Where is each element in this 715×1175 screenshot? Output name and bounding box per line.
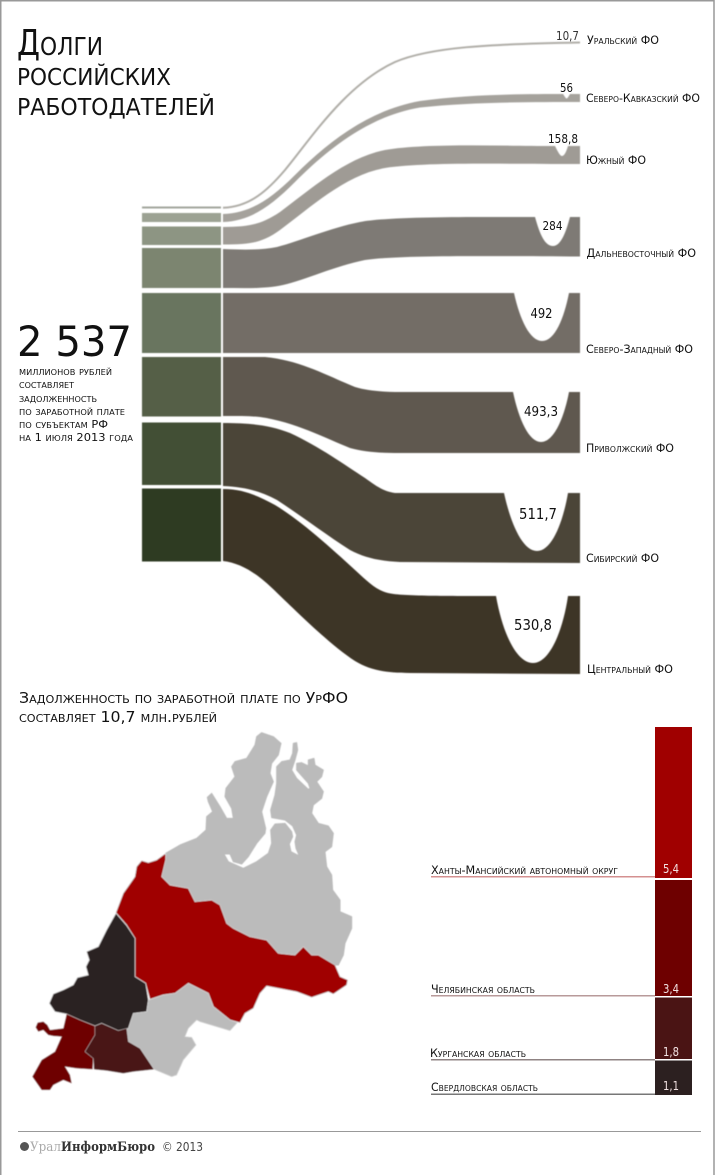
total figure and description: 2 537: [17, 317, 132, 366]
title: Д: [17, 23, 40, 64]
map region: Yamal-Nenets: [162, 733, 352, 965]
stacked total bar: [142, 206, 221, 562]
flow: North Caucasus: [223, 94, 580, 222]
map region: Tyumen: [127, 983, 237, 1077]
regional bar: Chelyabinsk: Челябинская область: [431, 982, 535, 996]
footer: © 2013: [162, 1140, 203, 1154]
regional bar: Kurgan: Курганская область: [430, 1046, 526, 1060]
flow labels: Приволжский ФО: [586, 441, 674, 455]
map region: Kurgan: [85, 1023, 154, 1073]
regional bar: Sverdlovsk: [431, 1060, 692, 1095]
flow values: 56: [560, 81, 573, 95]
total figure and description: задолженность: [19, 392, 97, 405]
flow: Far Eastern: [223, 217, 580, 288]
flow labels: Уральский ФО: [587, 33, 659, 47]
flow labels: [586, 33, 700, 676]
regional bar: Chelyabinsk: 3,4: [663, 982, 679, 996]
total figure and description: на 1 июля 2013 года: [19, 431, 134, 444]
footer: ИнформБюро: [61, 1140, 155, 1155]
flow: Volga: [223, 357, 580, 453]
total figure and description: составляет: [19, 378, 74, 391]
section heading: Ural district: Задолженность по заработной плате по УрФО: [19, 689, 348, 707]
flow: Ural: [223, 42, 580, 208]
flow values: 158,8: [548, 132, 578, 146]
section heading: Ural district: составляет 10,7 млн.рублей: [19, 708, 217, 726]
map of the Ural federal district: [32, 733, 352, 1090]
flow labels: Северо-Кавказский ФО: [586, 91, 700, 105]
map region: Chelyabinsk: [32, 1014, 95, 1090]
total figure and description: [17, 317, 134, 444]
flow values: 493,3: [524, 405, 558, 420]
regional bar: Khanty-Mansi: [431, 727, 692, 878]
title: [17, 23, 215, 121]
total figure and description: по субъектам РФ: [19, 418, 108, 431]
flow values: 284: [542, 219, 562, 233]
flow: Central: [223, 489, 580, 674]
flow: Siberian: [223, 423, 580, 563]
sankey flows: [223, 42, 580, 674]
title: РОССИЙСКИХ: [17, 63, 171, 91]
title: РАБОТОДАТЕЛЕЙ: [17, 93, 215, 121]
regional bar: Chelyabinsk: [431, 880, 692, 996]
flow values: 492: [530, 307, 552, 322]
flow values: 10,7: [556, 29, 579, 43]
regional bar: Khanty-Mansi: 5,4: [663, 862, 679, 876]
flow values: 511,7: [519, 505, 557, 523]
map region: Khanty-Mansi: [116, 853, 348, 1023]
flow: Southern: [223, 145, 580, 244]
regional bar: Sverdlovsk: Свердловская область: [431, 1080, 538, 1094]
flow values: [514, 29, 579, 634]
flow labels: Центральный ФО: [587, 662, 673, 676]
regional bar: Kurgan: [430, 998, 692, 1060]
regional bar: Kurgan: 1,8: [663, 1045, 679, 1059]
flow labels: Южный ФО: [586, 153, 646, 167]
regional bar: Sverdlovsk: 1,1: [663, 1079, 679, 1093]
flow labels: Сибирский ФО: [586, 551, 659, 565]
total figure and description: по заработной плате: [19, 405, 125, 418]
section heading: Ural district: [19, 689, 348, 726]
flow values: 530,8: [514, 616, 552, 634]
footer: Урал: [30, 1140, 61, 1155]
footer: [18, 1131, 701, 1155]
map region: Sverdlovsk: [49, 913, 148, 1031]
regional bar: Khanty-Mansi: Ханты-Мансийский автономный округ: [431, 863, 618, 877]
title: ОЛГИ: [40, 32, 103, 61]
flow labels: Дальневосточный ФО: [586, 246, 696, 260]
total figure and description: миллионов рублей: [19, 365, 112, 378]
flow labels: Северо-Западный ФО: [586, 342, 693, 356]
flow: North-Western: [223, 293, 580, 353]
